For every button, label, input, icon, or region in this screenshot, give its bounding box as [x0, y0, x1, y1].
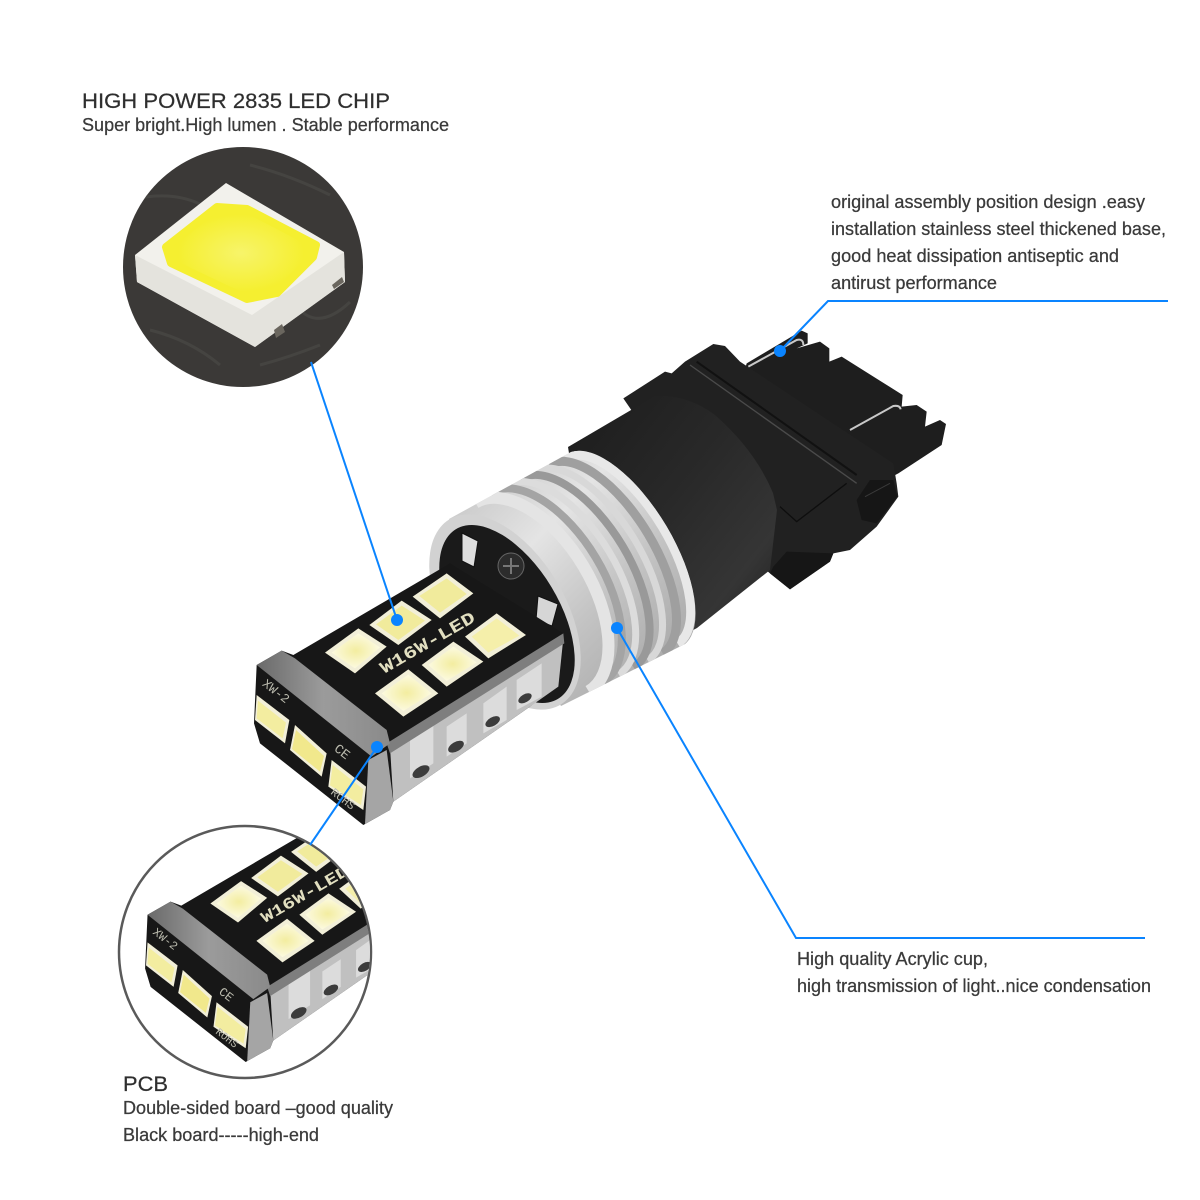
text block: PCB description: Double-sided board –good quality [123, 1098, 393, 1118]
text block: base description: antirust performance [831, 273, 997, 293]
panel: LED chip close-up circle [123, 147, 363, 387]
text block: PCB description [123, 1098, 393, 1145]
title: high power chip: HIGH POWER 2835 LED CHIP [82, 90, 390, 113]
text block: cup description: High quality Acrylic cup, [797, 949, 988, 969]
text block: cup description: high transmission of light..nice condensation [797, 976, 1151, 996]
text block: cup description [797, 949, 1151, 996]
icon: PCB tip with LEDs [254, 563, 564, 825]
icon: zoomed PCB tip: W16W-LED [258, 863, 352, 927]
heading: PCB: PCB [123, 1073, 168, 1096]
board marking W16W-LED: W16W-LED [377, 609, 479, 679]
icon: chip body [135, 183, 345, 347]
text block: base description [831, 192, 1166, 293]
callout line: cup [611, 622, 1145, 938]
icon: silver acrylic cup [429, 450, 696, 710]
text block: base description: original assembly position design .easy [831, 192, 1145, 212]
icon: zoomed PCB tip: ROHS [213, 1027, 240, 1051]
board marking XW-2: XW-2 [259, 676, 292, 707]
board marking ROHS: ROHS [328, 787, 357, 813]
panel: bulb illustration [254, 331, 946, 825]
board marking CE: CE [330, 742, 352, 764]
icon: front circuit disc [411, 502, 603, 726]
panel: PCB close-up circle [118, 824, 372, 1080]
icon: zoomed PCB tip [145, 838, 370, 1062]
icon: zoomed PCB tip: XW-2 [150, 926, 180, 954]
icon: zoomed PCB tip: CE [216, 985, 236, 1005]
icon: black cylinder [568, 396, 777, 662]
text block: base description: installation stainless steel thickened base, [831, 219, 1166, 239]
callout line: PCB [310, 741, 383, 845]
callout line: chip [311, 362, 403, 626]
callout line: base [774, 301, 1168, 357]
text block: base description: good heat dissipation antiseptic and [831, 246, 1119, 266]
text block: PCB description: Black board-----high-end [123, 1125, 319, 1145]
icon: connector tabs [623, 331, 946, 589]
subtitle: chip description: Super bright.High lumen . Stable performance [82, 115, 449, 135]
